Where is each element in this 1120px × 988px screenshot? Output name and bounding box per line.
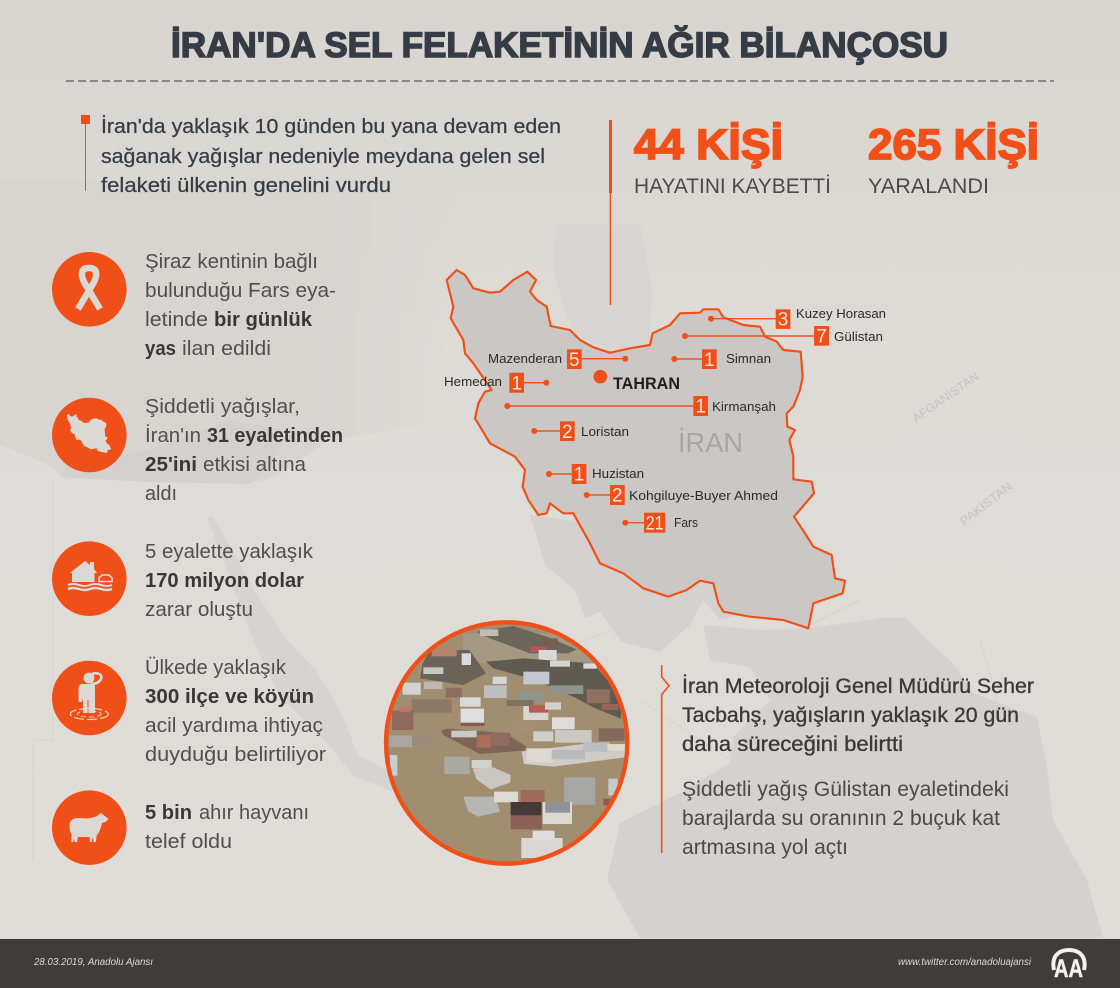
quote block: artmasına yol açtı bbox=[682, 836, 848, 859]
icon: Iran silhouette bbox=[52, 398, 127, 472]
intro text block: İran'da yaklaşık 10 günden bu yana devam eden bbox=[101, 115, 561, 138]
province: Hemedan: 1 bbox=[511, 373, 522, 394]
item: mourning: bulunduğu Fars eya- bbox=[145, 280, 336, 302]
province: Kohgiluye-Buyer Ahmed: 2 bbox=[612, 486, 623, 507]
quote block bbox=[662, 665, 1034, 859]
quote block: barajlarda su oranının 2 buçuk kat bbox=[682, 807, 1000, 830]
province: Simnan bbox=[702, 349, 771, 371]
province: Hemedan: Hemedan bbox=[444, 374, 502, 389]
stat: deaths: HAYATINI KAYBETTİ bbox=[634, 175, 831, 198]
province: Mazenderan: Mazenderan bbox=[488, 351, 562, 366]
province: Kirmanşah: 1 bbox=[695, 397, 706, 418]
item: mourning: bir günlük bbox=[214, 309, 313, 331]
quote block: İran Meteoroloji Genel Müdürü Seher bbox=[682, 675, 1034, 698]
chevron divider bbox=[662, 665, 669, 853]
province: Gülistan bbox=[814, 326, 883, 348]
province: Mazenderan bbox=[488, 349, 582, 371]
map label: İran: İRAN bbox=[678, 427, 743, 458]
quote block: Tacbahş, yağışların yaklaşık 20 gün bbox=[682, 704, 1019, 727]
icon: sheep bbox=[52, 790, 127, 865]
item: provinces affected: aldı bbox=[145, 483, 177, 505]
item: emergency aid: Ülkede yaklaşık bbox=[145, 657, 287, 679]
label: Afganistan: AFGANİSTAN bbox=[910, 369, 982, 425]
province: Hemedan bbox=[444, 373, 524, 394]
item: emergency aid: acil yardıma ihtiyaç bbox=[145, 715, 323, 737]
map outline bbox=[447, 270, 845, 628]
province: Huzistan: Huzistan bbox=[592, 466, 644, 481]
province: Huzistan: 1 bbox=[574, 465, 584, 486]
photo: flooded town bbox=[380, 620, 633, 867]
province: Kohgiluye-Buyer Ahmed: Kohgiluye-Buyer Ahmed bbox=[629, 488, 778, 503]
province: Kohgiluye-Buyer Ahmed bbox=[610, 485, 778, 507]
intro text block bbox=[81, 115, 561, 197]
intro text block: felaketi ülkenin genelini vurdu bbox=[101, 175, 391, 197]
item: damage: 5 eyalette yaklaşık bbox=[145, 541, 314, 563]
stat divider line bbox=[609, 120, 612, 305]
province: Loristan: 2 bbox=[562, 422, 573, 443]
item: damage: zarar oluştu bbox=[145, 599, 253, 621]
item: damage bbox=[52, 541, 314, 621]
item: provinces affected bbox=[52, 396, 343, 505]
stat: deaths bbox=[634, 121, 831, 198]
province: Kuzey Horasan: 3 bbox=[778, 310, 788, 330]
item: damage: 170 milyon dolar bbox=[145, 570, 304, 592]
footer url: www.twitter.com/anadoluajansi bbox=[898, 957, 1032, 968]
connector lines and dots bbox=[504, 316, 814, 526]
footer date: 28.03.2019, Anadolu Ajansı bbox=[33, 957, 153, 968]
quote block: daha süreceğini belirtti bbox=[682, 733, 903, 756]
item: emergency aid bbox=[52, 657, 326, 766]
province: Fars bbox=[644, 513, 698, 534]
item: livestock: ahır hayvanı bbox=[199, 802, 309, 824]
item: emergency aid: duyduğu belirtiliyor bbox=[145, 744, 326, 766]
icon: flooded house bbox=[52, 541, 127, 616]
province: Gülistan: 7 bbox=[816, 326, 827, 348]
stat: injured bbox=[868, 121, 1039, 198]
item: mourning bbox=[52, 251, 336, 360]
item: livestock: 5 bin bbox=[145, 802, 192, 824]
capital: Tahran: TAHRAN bbox=[613, 375, 680, 393]
province: Kuzey Horasan: Kuzey Horasan bbox=[796, 306, 886, 321]
province: Mazenderan: 5 bbox=[569, 350, 580, 371]
footer bar bbox=[0, 939, 1120, 988]
province: Loristan: Loristan bbox=[581, 424, 629, 439]
province: Fars: 21 bbox=[646, 513, 664, 534]
stat: injured: 265 KİŞİ bbox=[868, 121, 1039, 169]
item: provinces affected: 31 eyaletinden bbox=[207, 425, 343, 447]
province: Fars: Fars bbox=[674, 515, 698, 530]
label: Pakistan: PAKİSTAN bbox=[957, 479, 1015, 528]
province: Kirmanşah bbox=[693, 396, 776, 418]
province: Kirmanşah: Kirmanşah bbox=[712, 399, 776, 414]
title divider bbox=[66, 80, 1054, 82]
province: Simnan: Simnan bbox=[726, 351, 771, 366]
item: livestock bbox=[52, 790, 309, 865]
province: Loristan bbox=[560, 421, 629, 443]
logo: AA: AA bbox=[1054, 955, 1083, 983]
item: livestock: telef oldu bbox=[145, 831, 232, 853]
intro text block: sağanak yağışlar nedeniyle meydana gelen sel bbox=[101, 146, 545, 168]
province: Gülistan: Gülistan bbox=[834, 329, 883, 344]
title: İRAN'DA SEL FELAKETİNİN AĞIR BİLANÇOSU bbox=[171, 25, 948, 65]
item: mourning: yas bbox=[145, 338, 176, 360]
stat: injured: YARALANDI bbox=[868, 175, 989, 198]
item: mourning: ilan edildi bbox=[182, 338, 271, 360]
item: provinces affected: İran'ın bbox=[145, 424, 201, 447]
item: provinces affected: 25'ini bbox=[145, 454, 197, 476]
capital: Tahran bbox=[594, 370, 680, 393]
item: mourning: Şiraz kentinin bağlı bbox=[145, 251, 318, 273]
icon: ribbon bbox=[52, 252, 127, 327]
quote block: Şiddetli yağış Gülistan eyaletindeki bbox=[682, 778, 1009, 801]
item: provinces affected: etkisi altına bbox=[203, 454, 307, 476]
item: emergency aid: 300 ilçe ve köyün bbox=[145, 686, 314, 708]
icon: person in water bbox=[52, 661, 127, 735]
item: mourning: letinde bbox=[145, 309, 208, 331]
province: Kuzey Horasan bbox=[776, 306, 886, 330]
province: Simnan: 1 bbox=[704, 350, 715, 371]
province: Huzistan bbox=[572, 464, 644, 486]
item: provinces affected: Şiddetli yağışlar, bbox=[145, 396, 300, 418]
stat: deaths: 44 KİŞİ bbox=[634, 121, 783, 169]
Iran map bbox=[444, 270, 886, 628]
